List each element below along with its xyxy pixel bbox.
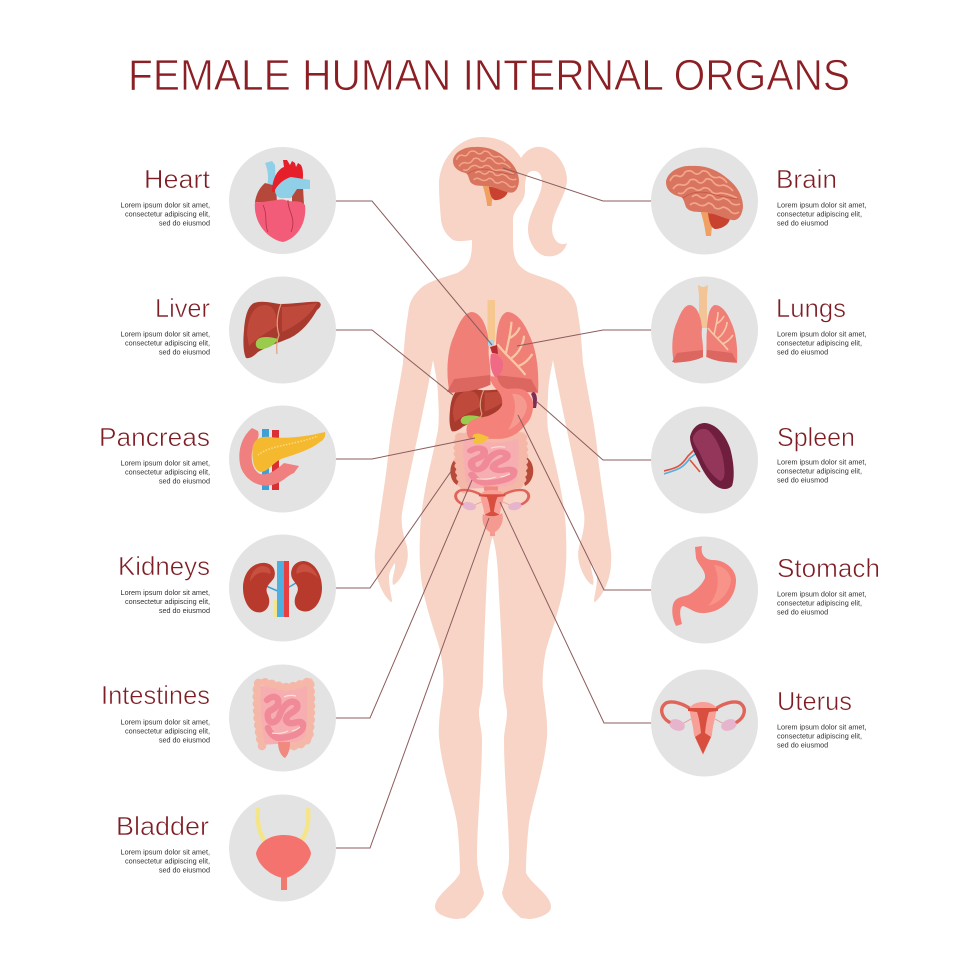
label: liver: consectetur adipiscing elit, bbox=[125, 338, 210, 348]
icon: uterus bbox=[662, 702, 744, 755]
label: kidneys: Kidneys bbox=[118, 551, 210, 581]
icon part: lung pair bbox=[672, 305, 737, 363]
label: spleen: Lorem ipsum dolor sit amet, bbox=[777, 458, 866, 466]
organ: kidneys in body bbox=[450, 456, 533, 486]
label: heart: Lorem ipsum dolor sit amet, bbox=[121, 200, 210, 210]
label: brain: Lorem ipsum dolor sit amet, bbox=[777, 200, 866, 210]
label: pancreas: Pancreas bbox=[99, 422, 210, 452]
label: stomach: consectetur adipiscing elit, bbox=[777, 598, 862, 608]
leader lines bbox=[336, 168, 651, 848]
panel: stomach bbox=[651, 536, 880, 644]
label: lungs: Lorem ipsum dolor sit amet, bbox=[777, 330, 866, 338]
label: intestines: sed do eiusmod bbox=[159, 736, 210, 744]
organ: uterus in body bbox=[456, 490, 529, 527]
icon part: trachea bbox=[698, 285, 708, 328]
label: heart: consectetur adipiscing elit, bbox=[125, 210, 210, 218]
icon: kidneys bbox=[243, 561, 322, 617]
label: intestines bbox=[101, 680, 210, 744]
label: kidneys bbox=[118, 551, 210, 615]
label: stomach bbox=[777, 553, 880, 616]
organ: spleen in body bbox=[531, 392, 537, 408]
label: brain: consectetur adipiscing elit, bbox=[777, 210, 862, 218]
label: uterus bbox=[777, 686, 866, 750]
label: intestines: Intestines bbox=[101, 680, 210, 710]
icon: spleen bbox=[664, 423, 734, 489]
label: kidneys: consectetur adipiscing elit, bbox=[125, 597, 210, 606]
label: heart: Heart bbox=[144, 164, 211, 194]
organ: trachea in body bbox=[488, 300, 495, 342]
label: uterus: consectetur adipiscing elit, bbox=[777, 732, 862, 740]
label: pancreas bbox=[99, 422, 210, 486]
organ: brain in body bbox=[453, 147, 519, 206]
icon: brain bbox=[666, 166, 743, 236]
label: lungs: consectetur adipiscing elit, bbox=[777, 338, 862, 348]
label: brain: Brain bbox=[776, 164, 837, 194]
label: intestines: Lorem ipsum dolor sit amet, bbox=[121, 718, 210, 726]
body silhouette bbox=[375, 137, 611, 919]
label: intestines: consectetur adipiscing elit, bbox=[125, 726, 210, 736]
label: bladder: Bladder bbox=[116, 811, 209, 841]
title: FEMALE HUMAN INTERNAL ORGANS bbox=[128, 51, 850, 100]
organ: intestines in body bbox=[459, 435, 523, 500]
icon: bladder bbox=[256, 808, 311, 890]
organ: liver in body bbox=[449, 388, 520, 431]
label: uterus: sed do eiusmod bbox=[777, 740, 828, 750]
organ: bladder in body bbox=[482, 513, 503, 536]
label: liver bbox=[121, 293, 210, 356]
panel: lungs bbox=[651, 276, 866, 384]
label: bladder: Lorem ipsum dolor sit amet, bbox=[121, 848, 210, 856]
label: liver: Liver bbox=[155, 293, 210, 323]
label: stomach: sed do eiusmod bbox=[777, 608, 828, 616]
organ: lungs in body bbox=[447, 312, 538, 393]
label: uterus: Uterus bbox=[777, 686, 852, 716]
organ: heart in body bbox=[488, 340, 503, 377]
label: lungs bbox=[776, 293, 866, 356]
label: brain: sed do eiusmod bbox=[777, 218, 828, 228]
label: stomach: Stomach bbox=[777, 553, 880, 583]
label: pancreas: consectetur adipiscing elit, bbox=[125, 468, 210, 476]
label: pancreas: Lorem ipsum dolor sit amet, bbox=[121, 458, 210, 468]
icon: heart bbox=[255, 160, 310, 242]
label: lungs: sed do eiusmod bbox=[777, 348, 828, 356]
label: heart: sed do eiusmod bbox=[159, 218, 210, 228]
icon: lungs bbox=[672, 285, 737, 363]
panel: brain bbox=[651, 148, 866, 254]
panel: heart bbox=[121, 147, 336, 254]
label: kidneys: sed do eiusmod bbox=[159, 606, 210, 615]
label: spleen: Spleen bbox=[777, 422, 855, 452]
icon: intestines bbox=[257, 681, 311, 758]
panel: pancreas bbox=[99, 406, 336, 512]
label: kidneys: Lorem ipsum dolor sit amet, bbox=[121, 588, 210, 597]
panel: intestines bbox=[101, 664, 336, 772]
label: heart bbox=[121, 164, 211, 228]
panel: uterus bbox=[651, 670, 866, 776]
label: bladder: sed do eiusmod bbox=[159, 866, 210, 874]
icon: pancreas bbox=[239, 428, 325, 490]
label: spleen: consectetur adipiscing elit, bbox=[777, 466, 862, 476]
panel: liver bbox=[121, 276, 336, 384]
organ: stomach in body bbox=[466, 376, 533, 440]
label: bladder bbox=[116, 811, 210, 874]
label: uterus: Lorem ipsum dolor sit amet, bbox=[777, 722, 866, 732]
label: liver: Lorem ipsum dolor sit amet, bbox=[121, 330, 210, 338]
panel: spleen bbox=[651, 406, 866, 514]
label: liver: sed do eiusmod bbox=[159, 348, 210, 356]
icon: liver bbox=[243, 302, 321, 358]
label: lungs: Lungs bbox=[776, 293, 846, 323]
organ: pancreas in body bbox=[473, 433, 489, 444]
panel: kidneys bbox=[118, 534, 336, 642]
icon: stomach bbox=[672, 546, 736, 626]
label: spleen bbox=[777, 422, 866, 484]
label: bladder: consectetur adipiscing elit, bbox=[125, 856, 210, 866]
label: pancreas: sed do eiusmod bbox=[159, 476, 210, 486]
panel: bladder bbox=[116, 794, 336, 902]
label: spleen: sed do eiusmod bbox=[777, 476, 828, 484]
label: brain bbox=[776, 164, 866, 228]
label: stomach: Lorem ipsum dolor sit amet, bbox=[777, 590, 866, 598]
